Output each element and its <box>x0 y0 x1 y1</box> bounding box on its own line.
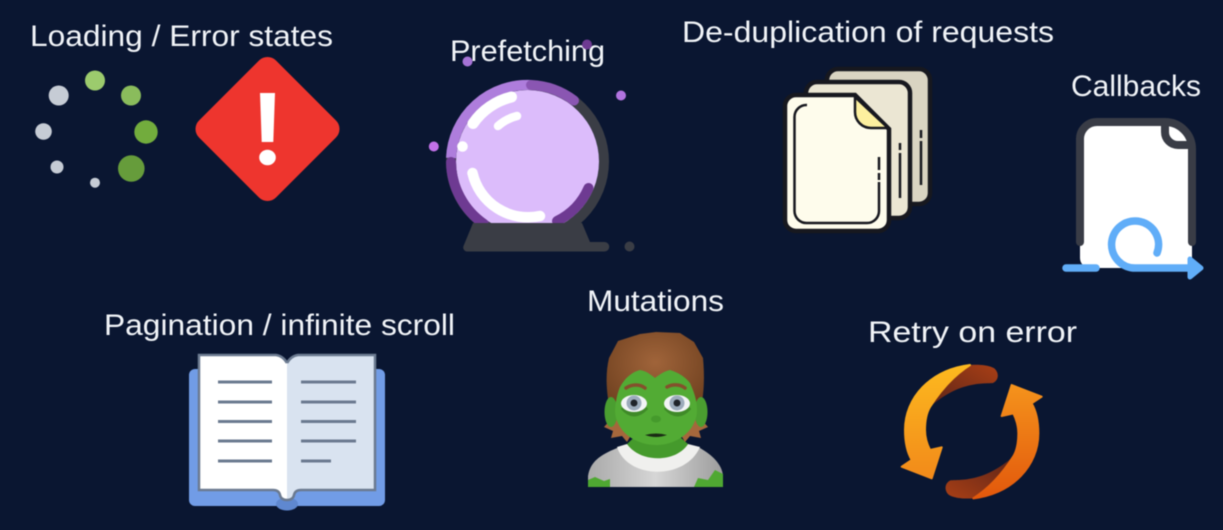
icon: open book <box>189 355 385 510</box>
icon: crystal ball <box>429 40 634 252</box>
heading: Loading / Error states: Loading / Error states <box>30 20 333 53</box>
heading: Callbacks: Callbacks <box>1071 70 1201 103</box>
icon: callback document with loop arrow <box>1066 122 1201 277</box>
icon: red error diamond <box>208 69 328 189</box>
heading: Mutations: Mutations <box>587 285 724 318</box>
right arrow <box>946 385 1042 499</box>
heading: Retry on error: Retry on error <box>868 316 1077 349</box>
left arrow <box>902 365 998 478</box>
icon: loading spinner <box>35 70 158 188</box>
icon: stack of documents <box>785 69 930 231</box>
icon: retry circular arrows <box>902 365 1042 499</box>
heading: De-duplication of requests: De-duplication of requests <box>682 16 1054 49</box>
heading: Pagination / infinite scroll: Pagination / infinite scroll <box>104 309 455 342</box>
icon: zombie <box>588 332 723 487</box>
heading: Prefetching: Prefetching <box>450 35 605 68</box>
